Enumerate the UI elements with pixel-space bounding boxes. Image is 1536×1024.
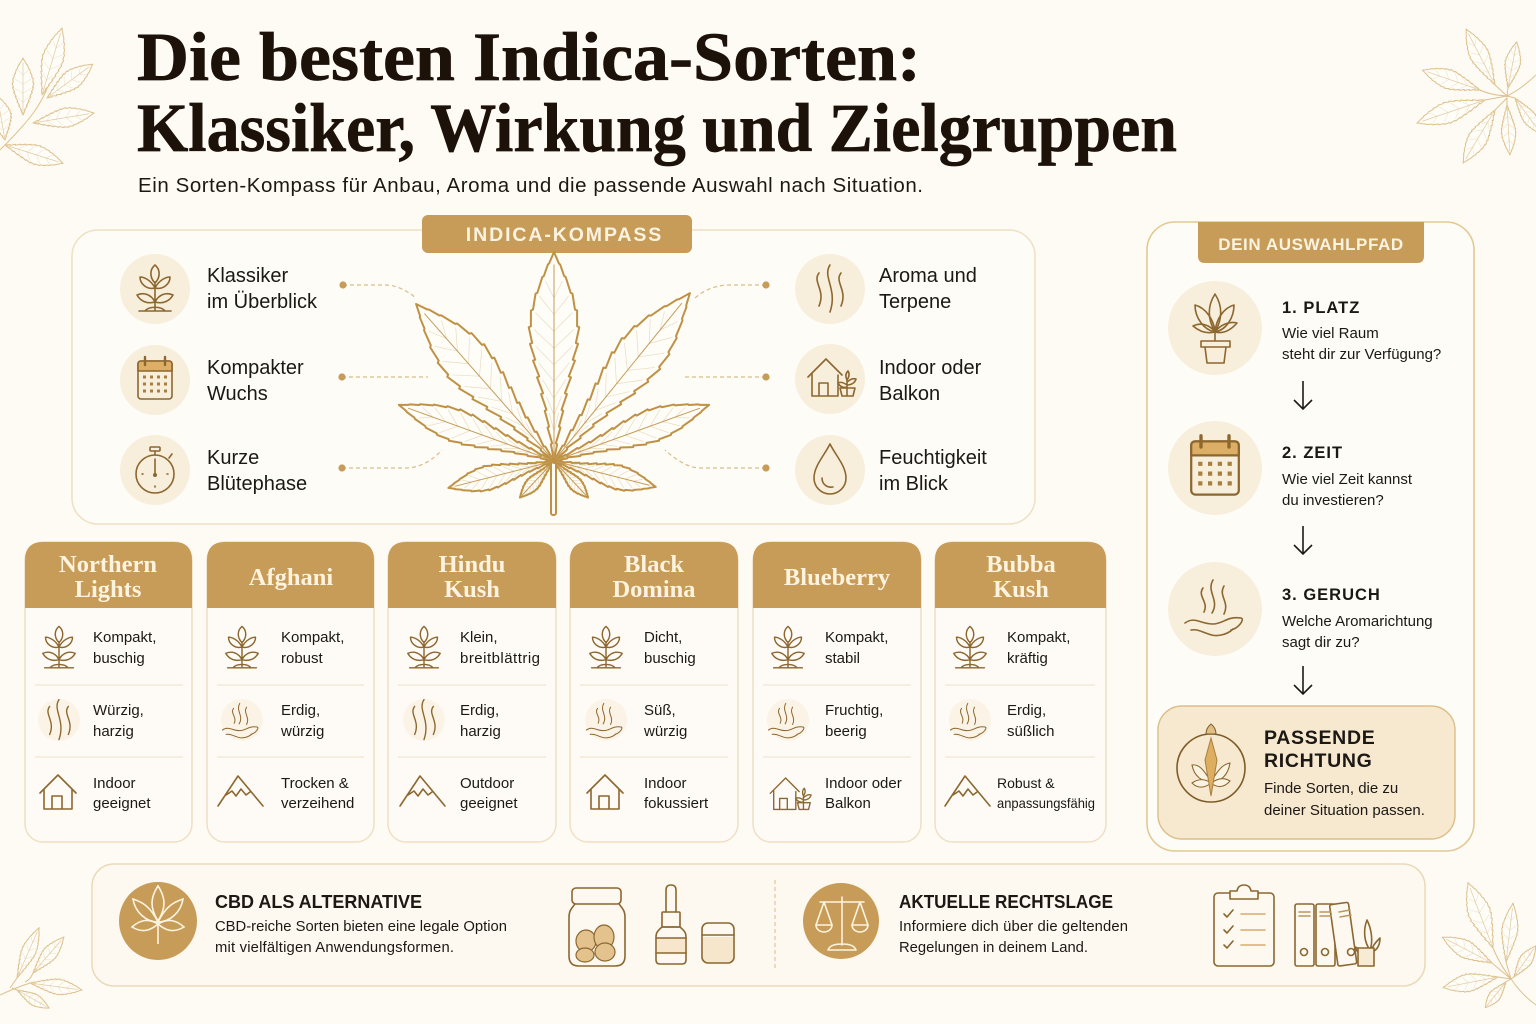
card: Blueberry: Blueberry <box>784 564 891 591</box>
card: Afghani: Erdig, <box>281 702 320 719</box>
card: Black Domina: würzig <box>643 723 687 740</box>
step 2: Zeit: 2. ZEIT <box>1282 444 1343 462</box>
icon: compass with leaf <box>1177 724 1245 802</box>
title: Die besten Indica-Sorten: <box>137 19 921 95</box>
card: Black Domina <box>570 542 738 842</box>
card: Bubba Kush: Erdig, <box>1007 702 1046 719</box>
item: Indoor oder Balkon: Balkon <box>879 383 940 405</box>
icon: binders with plant <box>1295 902 1380 966</box>
card: Northern Lights: Northern <box>59 551 157 578</box>
card: Blueberry: Indoor oder <box>825 775 902 792</box>
panel: Dein Auswahlpfad <box>1147 222 1474 851</box>
banner: Dein Auswahlpfad <box>1198 222 1424 263</box>
panel: Indica-Kompass <box>72 215 1035 524</box>
callout: Passende Richtung: PASSENDE <box>1264 727 1375 749</box>
card: Blueberry: Fruchtig, <box>825 702 883 719</box>
card: Afghani: Afghani <box>249 564 333 591</box>
icon: small jar <box>702 923 734 963</box>
card: Black Domina: fokussiert <box>644 795 709 812</box>
step 1: Platz: steht dir zur Verfügung? <box>1282 346 1441 363</box>
subtitle: Ein Sorten-Kompass für Anbau, Aroma und die passende Auswahl nach Situation. <box>138 174 923 197</box>
item: Feuchtigkeit im Blick: im Blick <box>879 473 949 495</box>
card: Bubba Kush: süßlich <box>1007 723 1055 740</box>
item: Indoor oder Balkon: Indoor oder <box>879 357 981 379</box>
text: CBD als Alternative: CBD ALS ALTERNATIVE <box>215 892 422 912</box>
text: Aktuelle Rechtslage: Informiere dich über die geltenden <box>899 919 1128 935</box>
card: Bubba Kush <box>935 542 1106 842</box>
card: Black Domina: Indoor <box>644 775 687 792</box>
card: Hindu Kush: Kush <box>444 576 500 603</box>
item: Aroma und Terpene: Terpene <box>879 291 951 313</box>
card: Bubba Kush: Bubba <box>986 551 1056 578</box>
card: Hindu Kush: Klein, <box>460 629 498 646</box>
card: Bubba Kush: kräftig <box>1007 650 1048 667</box>
illustration: central cannabis leaf <box>393 252 715 515</box>
card: Northern Lights: geeignet <box>93 795 151 812</box>
card: Afghani <box>207 542 374 842</box>
item: Klassiker im Überblick: im Überblick <box>207 291 318 313</box>
step 2: Zeit: Wie viel Zeit kannst <box>1282 471 1412 488</box>
text: CBD als Alternative <box>215 892 507 956</box>
item: Feuchtigkeit im Blick <box>795 435 987 505</box>
step 1: Platz: 1. PLATZ <box>1282 299 1360 317</box>
text: CBD als Alternative: mit vielfältigen Anwendungsformen. <box>215 940 454 956</box>
card: Afghani: Trocken & <box>281 775 349 792</box>
icon: CBD leaf <box>119 882 197 960</box>
card: Bubba Kush: anpassungsfähig <box>997 795 1095 811</box>
arrow <box>1294 666 1312 694</box>
card: Black Domina: Black <box>624 551 684 578</box>
callout: Passende Richtung: deiner Situation passen. <box>1264 802 1425 819</box>
card: Northern Lights: buschig <box>93 650 145 667</box>
card: Black Domina: Süß, <box>644 702 676 719</box>
icon: clipboard <box>1214 885 1274 966</box>
item: Klassiker im Überblick <box>120 254 318 324</box>
item: Aroma und Terpene: Aroma und <box>879 265 977 287</box>
card: Northern Lights: Kompakt, <box>93 629 156 646</box>
icon: jar with buds <box>569 888 625 966</box>
card: Blueberry: beerig <box>825 723 867 740</box>
card: Blueberry <box>753 542 921 842</box>
card: Afghani: robust <box>281 650 324 667</box>
item: Aroma und Terpene <box>795 254 977 324</box>
card: Northern Lights <box>25 542 192 842</box>
item: Klassiker im Überblick: Klassiker <box>207 265 288 287</box>
card: Bubba Kush: Kompakt, <box>1007 629 1070 646</box>
step 3: Geruch: 3. GERUCH <box>1282 586 1381 604</box>
step 3: Geruch: Welche Aromarichtung <box>1282 613 1433 630</box>
banner: Dein Auswahlpfad: DEIN AUSWAHLPFAD <box>1218 235 1404 254</box>
divider <box>774 880 776 970</box>
text: CBD als Alternative: CBD-reiche Sorten bieten eine legale Option <box>215 919 507 935</box>
callout: Passende Richtung: RICHTUNG <box>1264 750 1373 772</box>
item: Kurze Blütephase: Blütephase <box>207 473 307 495</box>
icon: scales <box>803 883 879 959</box>
step 1: Platz: Wie viel Raum <box>1282 325 1379 342</box>
card: Hindu Kush: breitblättrig <box>460 650 540 667</box>
text: Aktuelle Rechtslage: Regelungen in deinem Land. <box>899 940 1088 956</box>
item: Kompakter Wuchs: Kompakter <box>207 357 304 379</box>
card: Blueberry: Kompakt, <box>825 629 888 646</box>
card: Black Domina: Domina <box>612 576 696 603</box>
decoration: corner leaf top left <box>0 25 99 173</box>
step 1: Platz <box>1168 281 1441 375</box>
card: Northern Lights: Lights <box>75 576 141 603</box>
title: Klassiker, Wirkung und Zielgruppen <box>137 90 1177 166</box>
card: Blueberry: Balkon <box>825 795 871 812</box>
card: Afghani: verzeihend <box>281 795 354 812</box>
decoration: corner leaf bottom right <box>1438 878 1536 1011</box>
card: Bubba Kush: Kush <box>993 576 1049 603</box>
card: Afghani: würzig <box>280 723 324 740</box>
arrow <box>1294 526 1312 554</box>
card: Hindu Kush: Erdig, <box>460 702 499 719</box>
card: Hindu Kush: Outdoor <box>460 775 514 792</box>
step 2: Zeit: du investieren? <box>1282 492 1384 509</box>
item: Kompakter Wuchs: Wuchs <box>207 383 268 405</box>
step 2: Zeit <box>1168 421 1413 515</box>
text: Aktuelle Rechtslage <box>899 892 1128 956</box>
banner: Indica-Kompass <box>422 215 692 253</box>
item: Indoor oder Balkon <box>795 344 982 414</box>
card: Bubba Kush: Robust & <box>997 775 1055 791</box>
card: Blueberry: stabil <box>825 650 860 667</box>
card: Hindu Kush: harzig <box>460 723 501 740</box>
step 3: Geruch: sagt dir zu? <box>1282 634 1360 651</box>
card: Black Domina: Dicht, <box>644 629 682 646</box>
card: Northern Lights: harzig <box>93 723 134 740</box>
item: Kompakter Wuchs <box>120 345 304 415</box>
connector lines <box>338 281 770 472</box>
card: Hindu Kush <box>388 542 556 842</box>
item: Feuchtigkeit im Blick: Feuchtigkeit <box>879 447 987 469</box>
decoration: corner leaf bottom left <box>0 925 83 1013</box>
card: Hindu Kush: geeignet <box>460 795 518 812</box>
item: Kurze Blütephase <box>120 435 307 505</box>
decoration: corner leaf top right <box>1413 24 1536 168</box>
step 3: Geruch <box>1168 562 1433 656</box>
card: Northern Lights: Würzig, <box>93 702 144 719</box>
panel: bottom bar <box>92 864 1425 986</box>
arrow <box>1294 381 1312 409</box>
icon: dropper bottle <box>656 885 686 964</box>
card: Hindu Kush: Hindu <box>439 551 505 578</box>
title <box>137 19 1177 166</box>
text: Aktuelle Rechtslage: AKTUELLE RECHTSLAGE <box>899 892 1113 912</box>
item: Kurze Blütephase: Kurze <box>207 447 259 469</box>
callout: Passende Richtung <box>1158 706 1455 839</box>
banner: Indica-Kompass: INDICA-KOMPASS <box>466 224 663 246</box>
card: Black Domina: buschig <box>644 650 696 667</box>
card: Afghani: Kompakt, <box>281 629 344 646</box>
callout: Passende Richtung: Finde Sorten, die zu <box>1264 780 1398 797</box>
card: Northern Lights: Indoor <box>93 775 136 792</box>
